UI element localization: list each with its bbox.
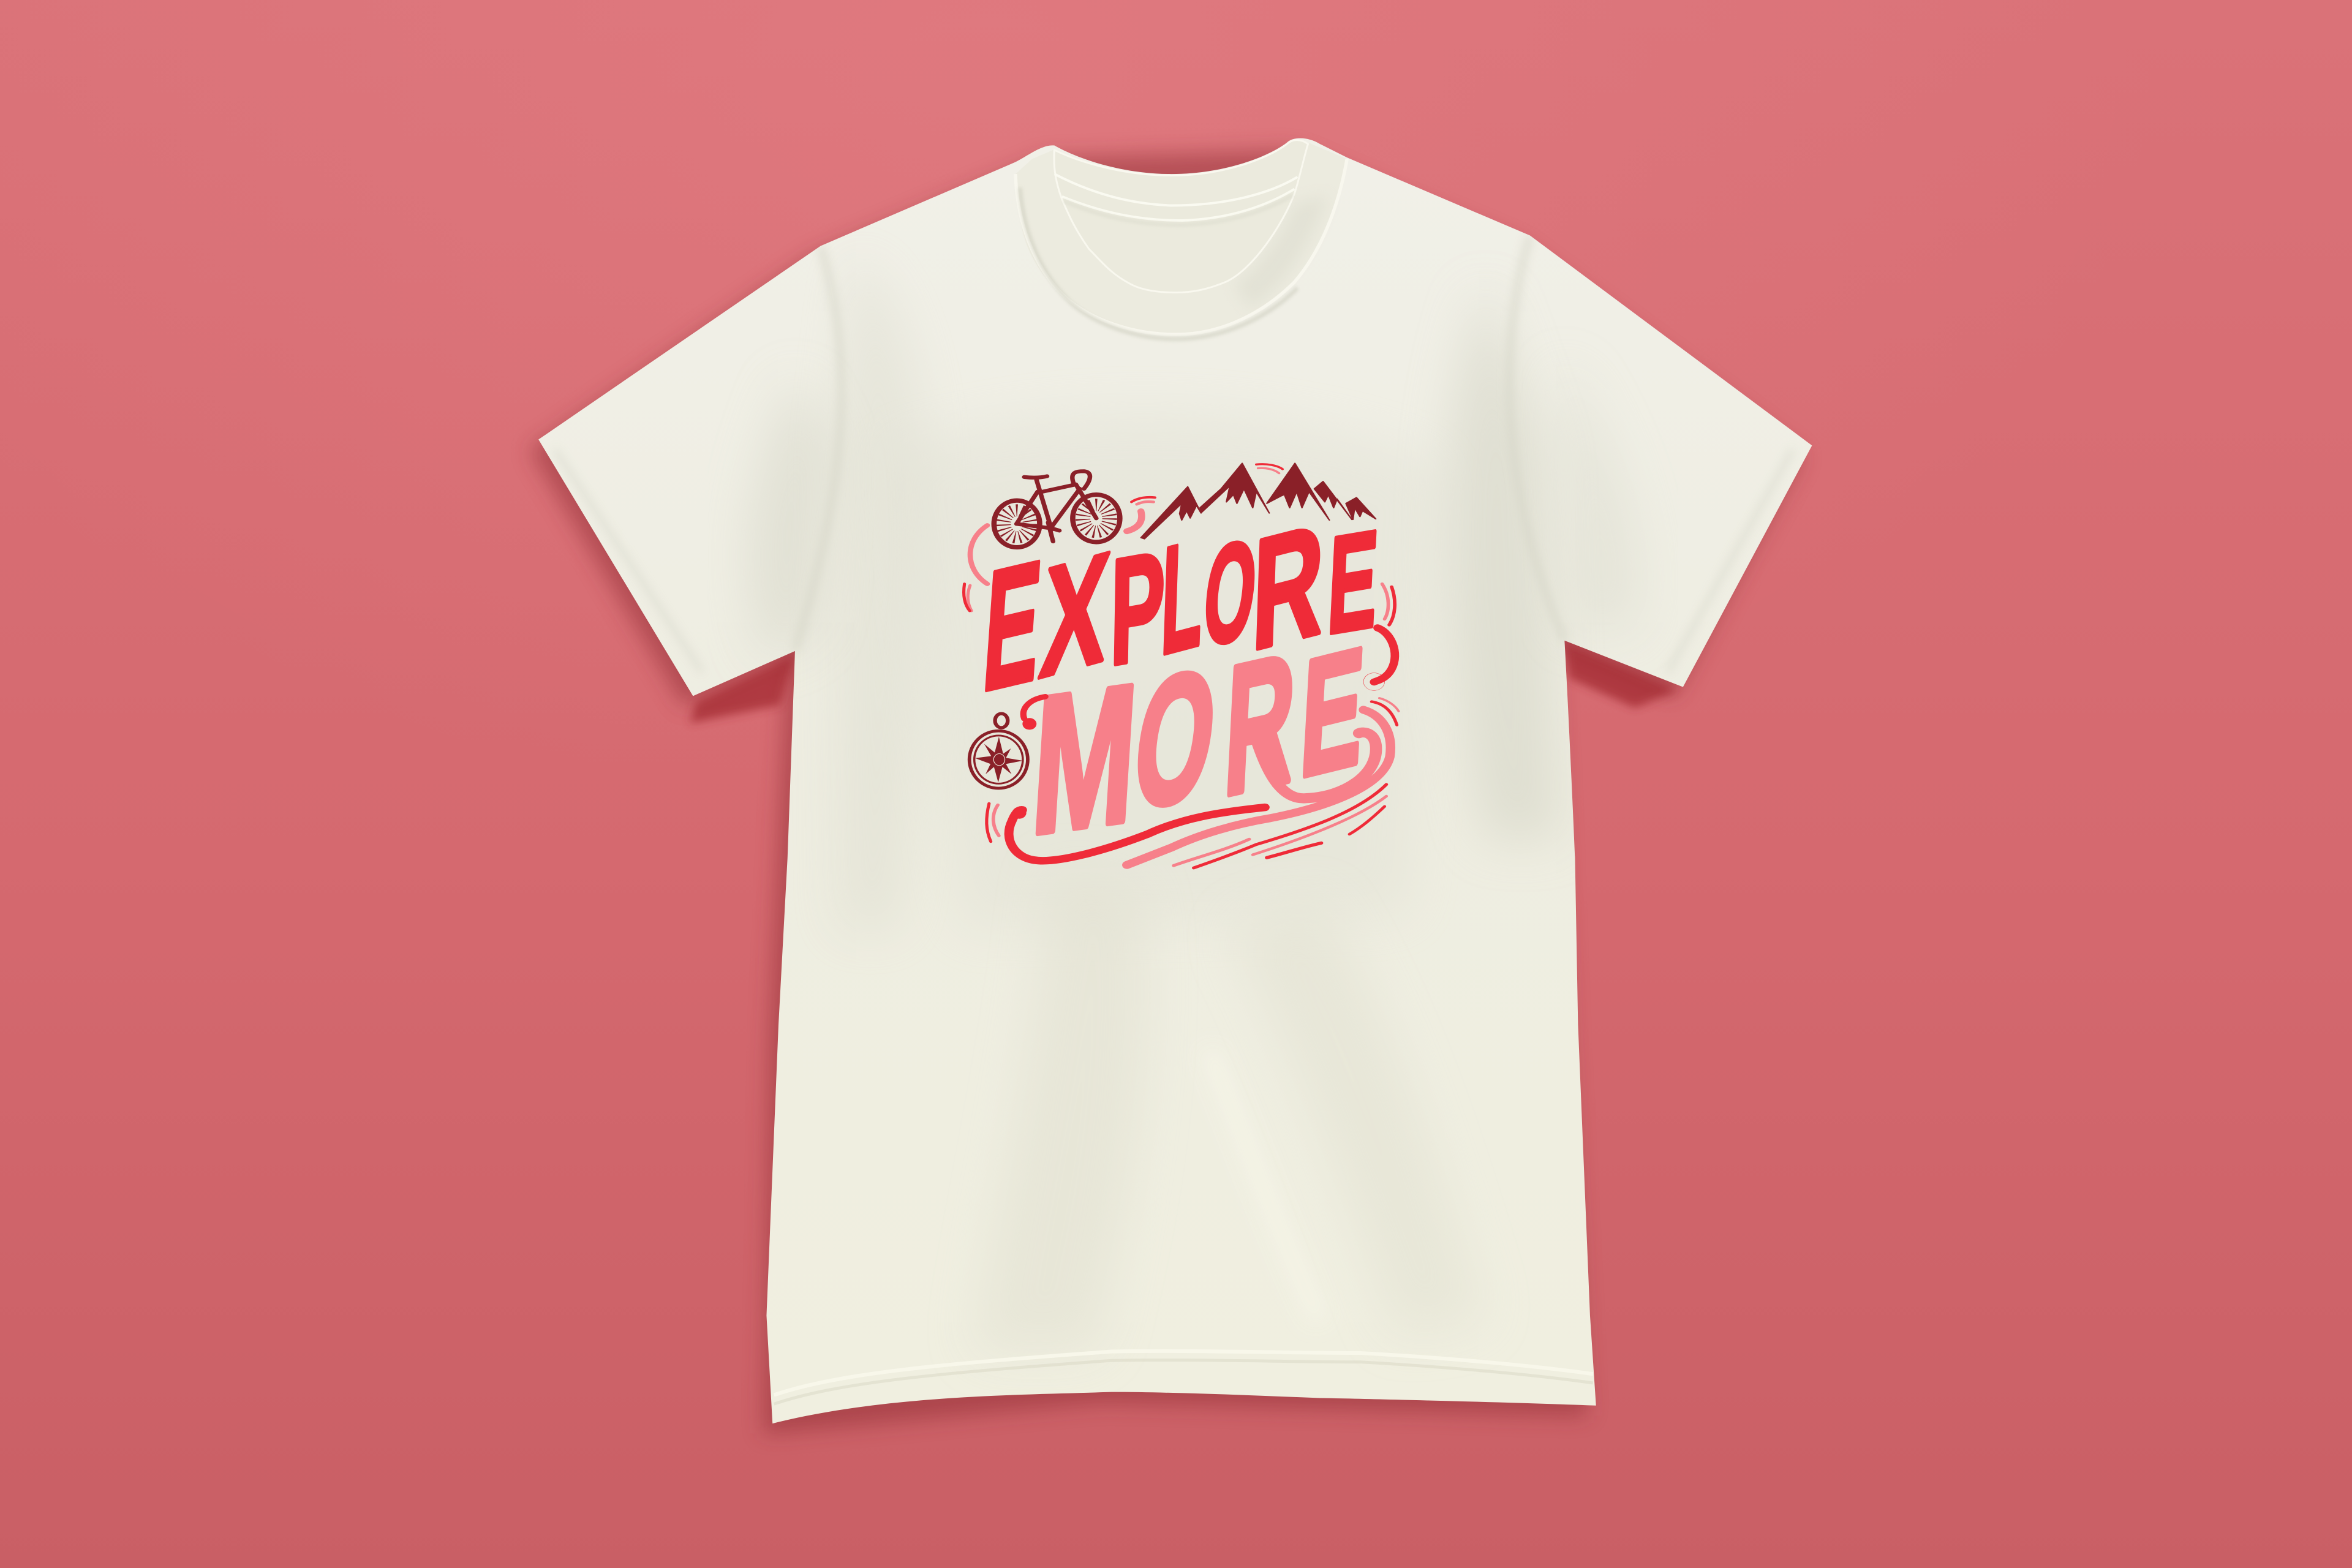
word: EXPLORE: E [978, 524, 1047, 728]
icon: bicycle [994, 471, 1120, 548]
back neck rib shadow [1063, 195, 1293, 225]
rib outer edge [1016, 159, 1347, 334]
rib outer shadow [1020, 187, 1297, 339]
red swoosh terminals [1012, 718, 1036, 819]
decorative line art [964, 463, 1399, 868]
pink swooshes [968, 468, 1399, 865]
collar [1016, 140, 1347, 339]
inner back of shirt [1054, 140, 1308, 293]
word: EXPLORE [978, 489, 1381, 728]
back neck rib stitching [1055, 174, 1297, 221]
t-shirt [529, 138, 1812, 1434]
word: MORE: O [1123, 631, 1227, 846]
red swooshes [964, 464, 1397, 868]
word: MORE: R [1221, 613, 1300, 834]
shirt drop shadow [529, 150, 1803, 1434]
fabric folds and shading [555, 235, 1793, 1404]
printed graphic: explore more [964, 463, 1399, 876]
front neck rib [1016, 143, 1347, 334]
icon: mountains [1141, 463, 1376, 539]
shirt body [538, 138, 1812, 1423]
word: EXPLORE: O [1197, 513, 1264, 674]
word: EXPLORE: E [1325, 502, 1381, 663]
word: EXPLORE: L [1159, 506, 1205, 687]
word: EXPLORE: P [1109, 519, 1166, 698]
rib shading [1233, 195, 1329, 309]
word: MORE [1027, 612, 1368, 876]
icon: compass [970, 714, 1028, 788]
word: MORE: M [1027, 642, 1142, 876]
word: EXPLORE: R [1250, 489, 1326, 684]
word: MORE: E [1297, 612, 1368, 812]
word: EXPLORE: X [1035, 518, 1115, 711]
